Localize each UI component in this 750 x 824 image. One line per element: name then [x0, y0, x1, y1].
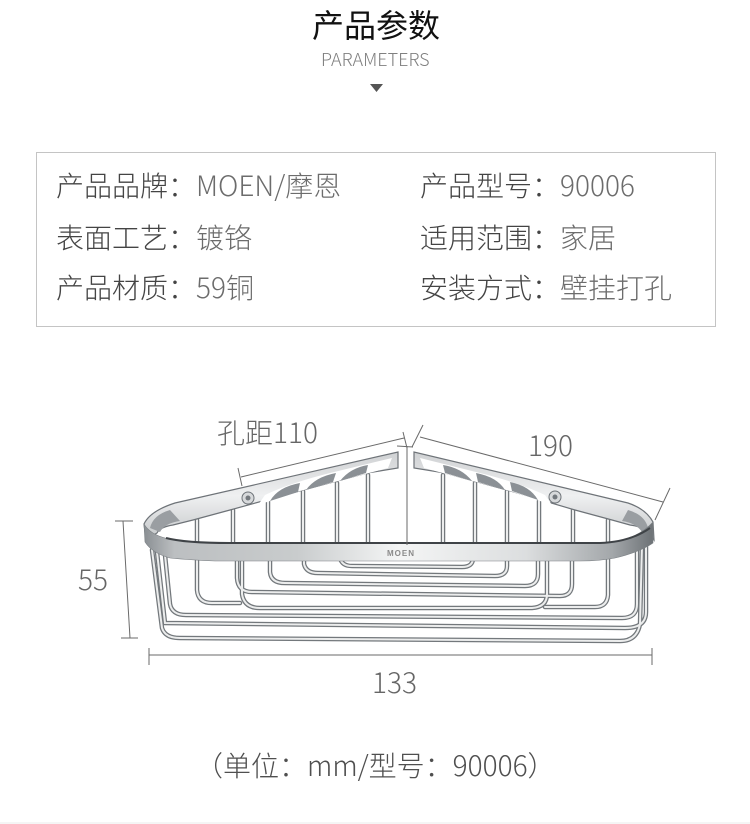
icon: down triangle [370, 84, 383, 92]
basket wires [152, 475, 646, 641]
surface: 表面工艺：镀铬 [56, 217, 252, 257]
dimension: depth 190 [412, 425, 670, 520]
title: 产品参数 [312, 1, 440, 47]
brand: 产品品牌：MOEN/摩恩 [56, 165, 341, 205]
label: 133: 133 [372, 662, 417, 702]
dimension: height 55 [115, 521, 138, 638]
label: 55: 55 [78, 559, 108, 599]
scope: 适用范围：家居 [420, 217, 616, 257]
label: 190: 190 [528, 425, 573, 465]
panel: parameter table [36, 152, 716, 327]
dimension: hole spacing [238, 432, 413, 545]
front band [144, 522, 653, 561]
material: 产品材质：59铜 [56, 267, 254, 307]
left back rail [144, 452, 398, 540]
bottom edge strip [0, 822, 750, 824]
right back rail [414, 452, 654, 540]
label: hole spacing: 孔距110 [217, 412, 318, 452]
caption: unit and model: （单位：mm/型号：90006） [195, 745, 556, 785]
dimension: width 133 [149, 648, 652, 665]
model: 产品型号：90006 [420, 165, 635, 205]
brand mark MOEN: MOEN [387, 549, 415, 558]
installation: 安装方式：壁挂打孔 [420, 267, 672, 307]
subtitle: PARAMETERS: PARAMETERS [321, 46, 430, 72]
front band highlight [166, 528, 650, 543]
